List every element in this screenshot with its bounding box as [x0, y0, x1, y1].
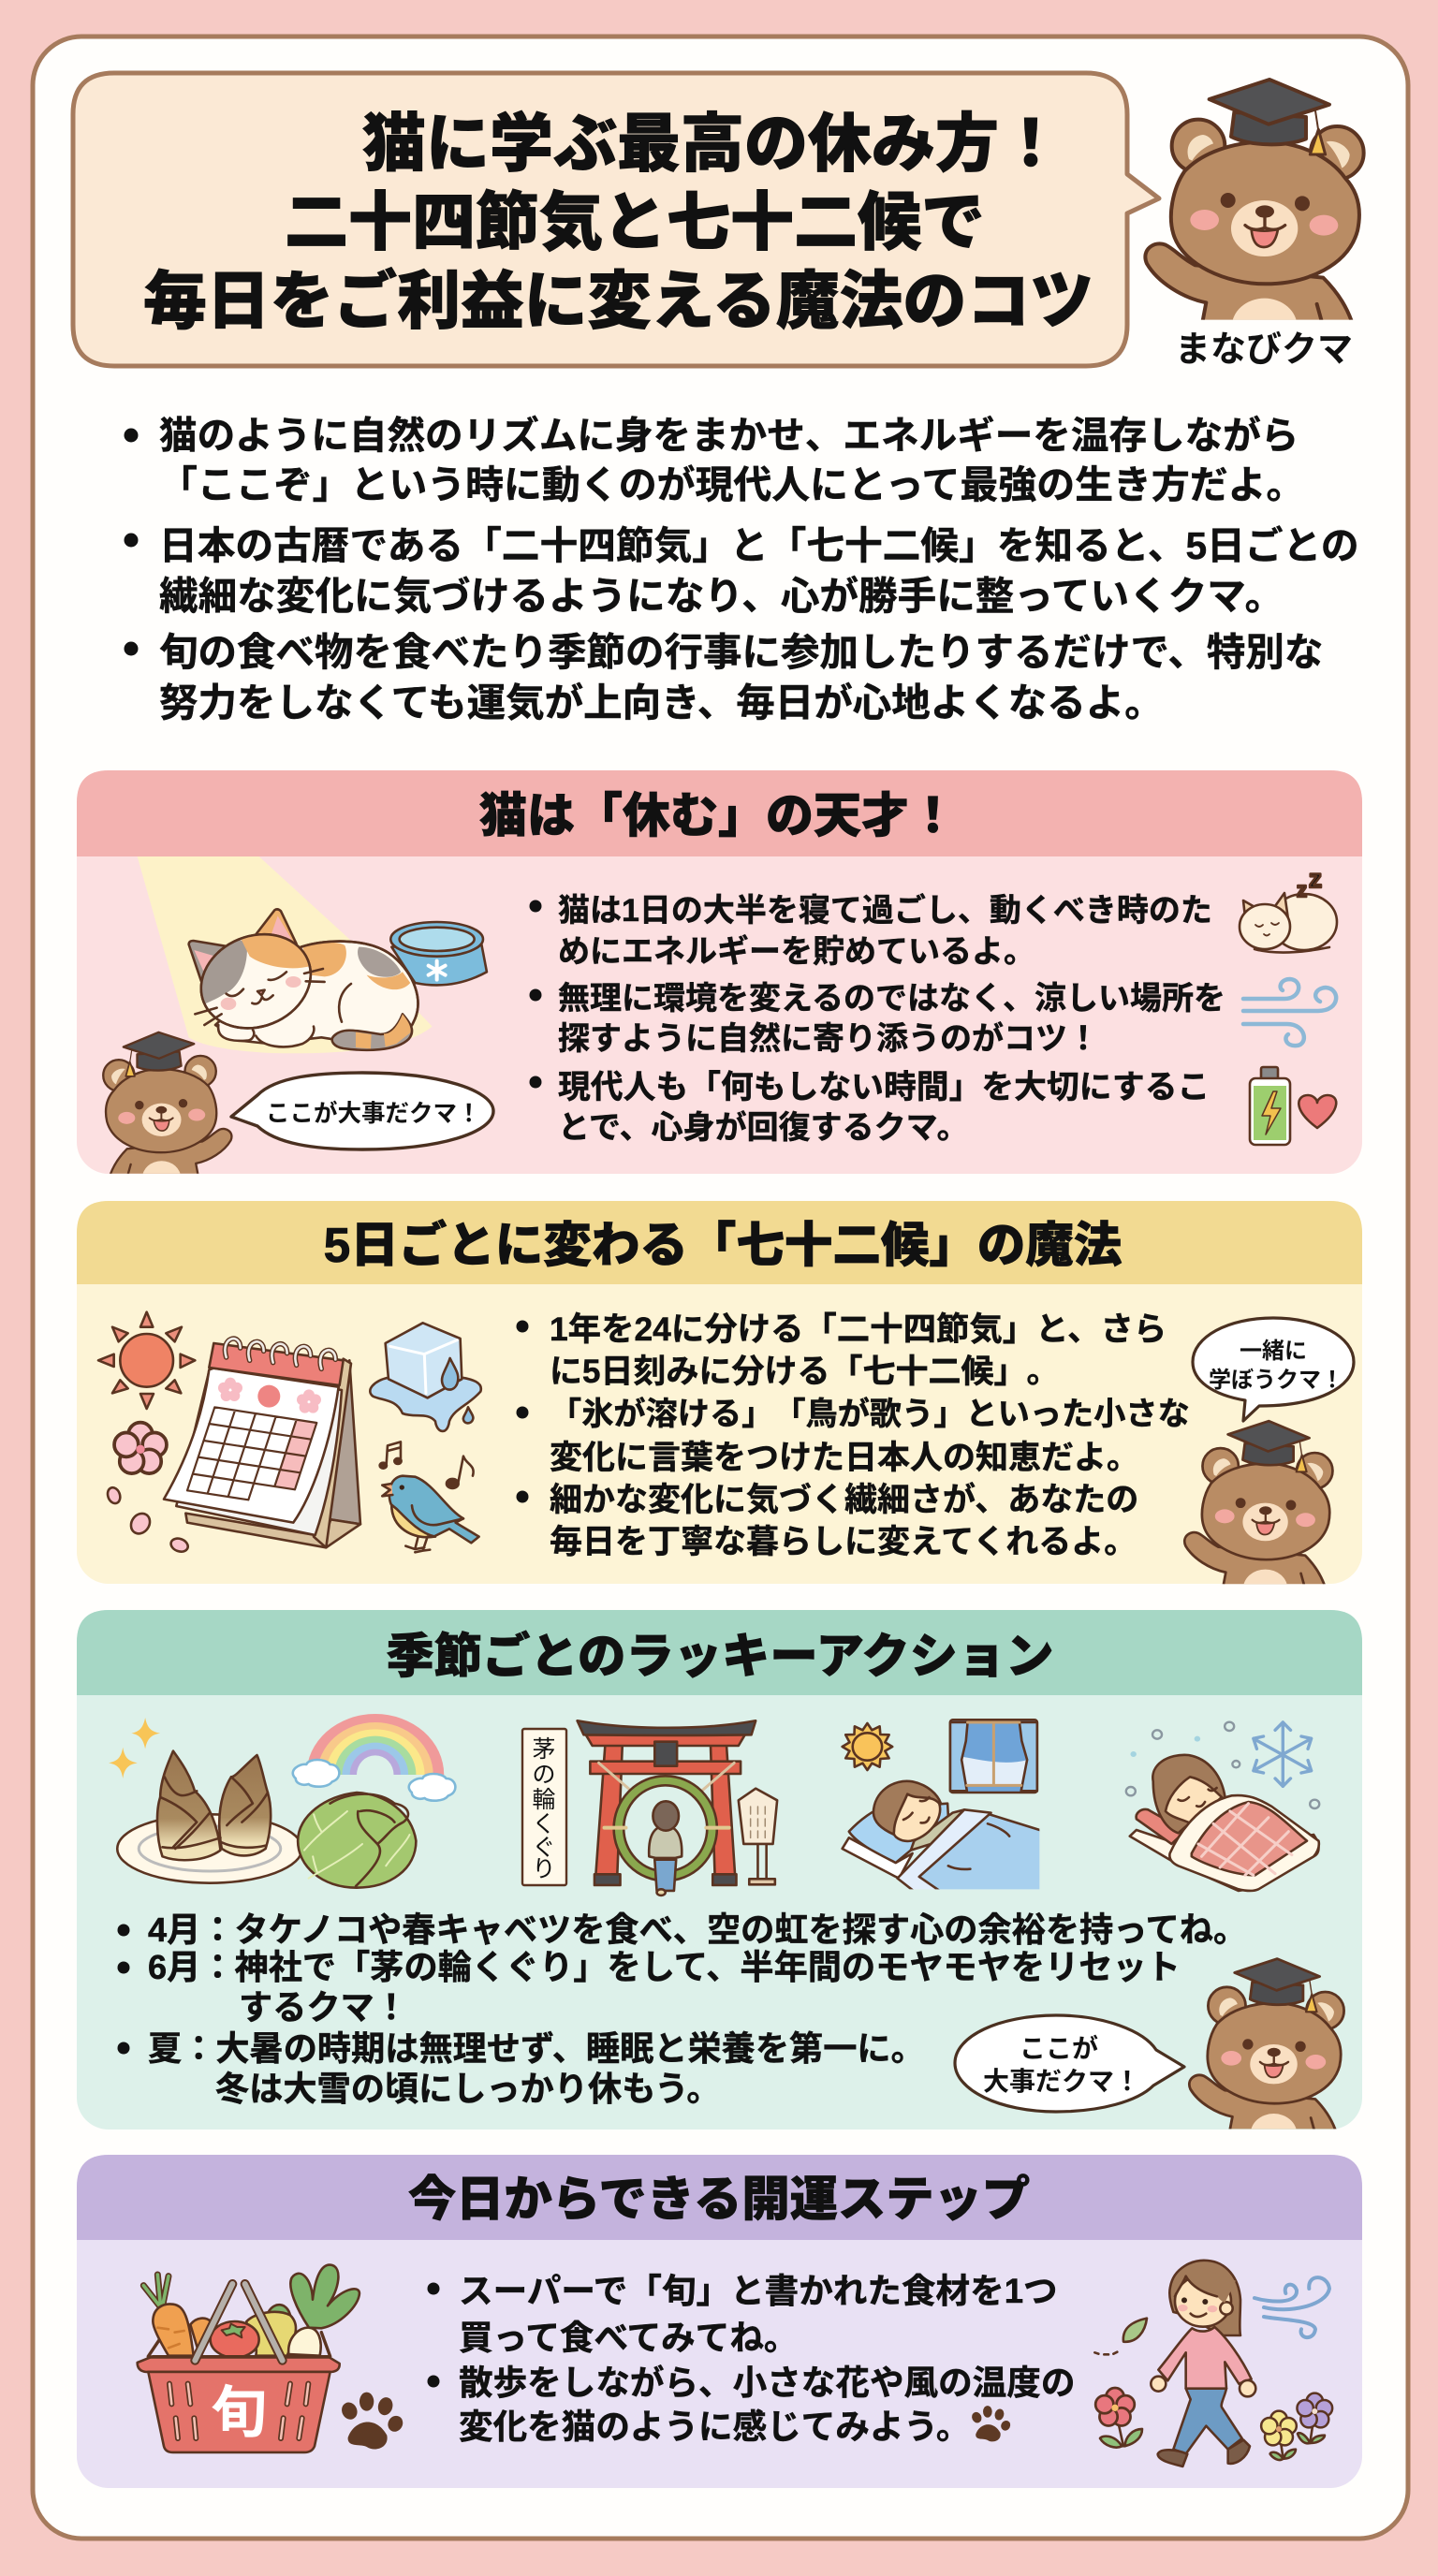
icon: small sleeping cat: z [1309, 864, 1322, 893]
illustration: woman walking among flowers in the breeze [1094, 2261, 1332, 2466]
bullet list: 探すように自然に寄り添うのがコツ！ [558, 1020, 1099, 1057]
bullet list: 無理に環境を変えるのではなく、涼しい場所を [558, 981, 1225, 1017]
icon: small sleeping cat: z [1297, 878, 1307, 901]
panel: luck steps to start today [77, 2155, 1362, 2488]
bullet list: 6月：神社で「茅の輪くぐり」をして、半年間のモヤモヤをリセット [148, 1948, 1181, 1986]
bullet list: とで、心身が回復するクマ。 [558, 1109, 969, 1146]
singing bird [382, 1476, 479, 1552]
section heading: 猫は「休む」の天才！ [479, 789, 957, 842]
sign: chinowa kuguri: く [532, 1811, 556, 1837]
bullet list: 細かな変化に気づく繊細さが、あなたの [550, 1482, 1138, 1518]
bullet list: 買って食べてみてね。 [459, 2319, 798, 2357]
bullet list: するクマ！ [239, 1988, 408, 2027]
desk calendar [164, 1339, 360, 1547]
bullet list: に5日刻みに分ける「七十二候」。 [550, 1354, 1059, 1390]
icon: small sleeping cat [1240, 864, 1337, 953]
sign: chinowa kuguri [522, 1729, 566, 1885]
section heading: 今日からできる開運ステップ [408, 2173, 1030, 2226]
section header: pink [77, 770, 1362, 856]
sign: chinowa kuguri: り [532, 1856, 556, 1882]
speech bubble: this is important [955, 2015, 1184, 2112]
section heading: 季節ごとのラッキーアクション [386, 1630, 1054, 1683]
intro bullet list: 「ここぞ」という時に動くのが現代人にとって最強の生き方だよ。 [159, 463, 1304, 506]
bullet list [118, 1910, 1247, 2108]
speech bubble: this is important: ここが [1020, 2033, 1098, 2063]
illustration: bamboo shoots, rainbow and cabbage [109, 1714, 455, 1888]
speech bubble: this is important: 大事だクマ！ [983, 2067, 1140, 2096]
bullet list [517, 1310, 1190, 1560]
icon: battery and heart [1250, 1067, 1336, 1145]
mascot: manabi bear [1145, 80, 1364, 356]
bear mascot [1189, 1959, 1344, 2154]
intro bullet list: 繊細な変化に気づけるようになり、心が勝手に整っていくクマ。 [159, 574, 1284, 618]
bullet list: 散歩をしながら、小さな花や風の温度の [459, 2364, 1075, 2402]
icon: small paw print [970, 2406, 1012, 2441]
bullet list [427, 2272, 1075, 2446]
bear mascot [1184, 1421, 1332, 1608]
section header: purple [77, 2155, 1362, 2240]
title speech bubble [73, 73, 1159, 366]
bullet list: 変化に言葉をつけた日本人の知恵だよ。 [550, 1440, 1139, 1476]
bear mascot [103, 1032, 231, 1194]
bullet list: 毎日を丁寧な暮らしに変えてくれるよ。 [550, 1524, 1137, 1560]
sign: chinowa kuguri: 茅 [532, 1736, 556, 1763]
bullet list: 現代人も「何もしない時間」を大切にするこ [558, 1069, 1210, 1105]
bullet list: 4月：タケノコや春キャベツを食べ、空の虹を探す心の余裕を持ってね。 [148, 1910, 1247, 1949]
title text: 二十四節気と七十二候で [285, 187, 985, 258]
title text: 猫に学ぶ最高の休み方！ [362, 109, 1063, 180]
icon: cool breeze [1243, 979, 1336, 1046]
bullet list: 1年を24に分ける「二十四節気」と、さら [550, 1310, 1167, 1348]
panel: the magic of 72 micro-seasons [77, 1201, 1362, 1608]
speech bubble: let's learn together [1193, 1318, 1354, 1421]
speech bubble: let's learn together: 一緒に [1240, 1339, 1307, 1364]
illustration: torii gate with grass ring and visitor [578, 1720, 777, 1895]
speech bubble: this is important [231, 1073, 493, 1149]
sign: chinowa kuguri: の [532, 1762, 556, 1788]
section header: green [77, 1610, 1362, 1695]
speech bubble: this is important: ここが大事だクマ！ [266, 1100, 481, 1127]
bullet list: 変化を猫のように感じてみよう。 [459, 2408, 970, 2446]
illustration: sleeping calico cat with water bowl [138, 856, 487, 1053]
illustration: shopping basket with seasonal vegetables [138, 2265, 360, 2452]
cherry blossom and petals [106, 1423, 190, 1554]
speech bubble: let's learn together: 学ぼうクマ！ [1209, 1368, 1343, 1393]
icon: paw print [339, 2393, 405, 2449]
panel: seasonal lucky actions [77, 1610, 1362, 2154]
section heading: 5日ごとに変わる「七十二候」の魔法 [324, 1218, 1123, 1272]
panel: cats are geniuses at resting [77, 770, 1362, 1194]
bullet list: めにエネルギーを貯めているよ。 [558, 934, 1035, 970]
section header: yellow [77, 1201, 1362, 1284]
sign: chinowa kuguri: 輪 [532, 1787, 556, 1813]
intro bullet list: 日本の古暦である「二十四節気」と「七十二候」を知ると、5日ごとの [159, 524, 1359, 567]
sun [98, 1312, 195, 1409]
illustration: summer sleep with sun and window [843, 1720, 1045, 1894]
music notes [380, 1442, 474, 1488]
illustration: winter sleep with snow [1126, 1722, 1319, 1891]
title text: 毎日をご利益に変える魔法のコツ [143, 266, 1093, 337]
bullet list [530, 893, 1225, 1146]
bullet list: 夏：大暑の時期は無理せず、睡眠と栄養を第一に。 [148, 2029, 925, 2068]
bullet list: 猫は1日の大半を寝て過ごし、動くべき時のた [558, 893, 1212, 929]
melting ice cube [370, 1323, 481, 1431]
illustration: sun, calendar, blossoms, ice and bird [98, 1312, 481, 1554]
basket label: 旬 [211, 2381, 267, 2444]
sign: chinowa kuguri: ぐ [532, 1835, 556, 1861]
title text [143, 109, 1093, 337]
bullet list: 冬は大雪の頃にしっかり休もう。 [215, 2070, 721, 2108]
intro bullet list: 猫のように自然のリズムに身をまかせ、エネルギーを温存しながら [159, 414, 1299, 457]
mascot name: まなびクマ [1175, 330, 1353, 370]
intro bullet list: 旬の食べ物を食べたり季節の行事に参加したりするだけで、特別な [159, 630, 1323, 674]
intro bullet list [124, 414, 1359, 724]
bullet list: スーパーで「旬」と書かれた食材を1つ [459, 2272, 1058, 2310]
bullet list: 「氷が溶ける」「鳥が歌う」といった小さな [550, 1396, 1190, 1432]
intro bullet list: 努力をしなくても運気が上向き、毎日が心地よくなるよ。 [159, 681, 1164, 724]
